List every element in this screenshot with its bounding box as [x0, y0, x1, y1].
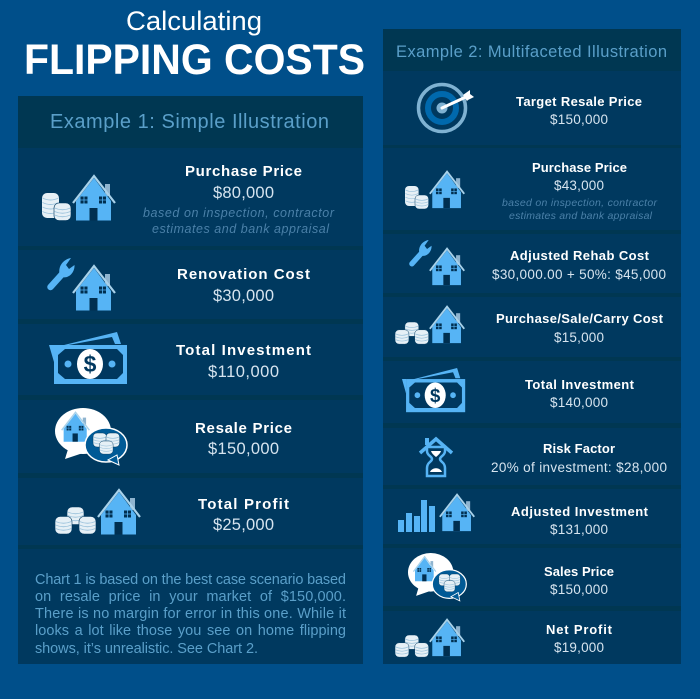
- row: purchase price: based on inspection, contractor: [143, 206, 335, 220]
- row: purchase price: estimates and bank appraisal: [152, 222, 330, 236]
- row: total profit: [18, 478, 363, 545]
- row: resale price: [18, 400, 363, 473]
- panel: example 1 simple illustration: [18, 96, 363, 664]
- row: target resale price: [383, 71, 681, 145]
- row: total investment: $110,000: [208, 363, 279, 381]
- panel: example 2 multifaceted illustration: [383, 29, 681, 664]
- note text: Chart 1 is based on the best case scenario based: [35, 572, 346, 588]
- title: FLIPPING COSTS: [24, 36, 365, 84]
- panel heading: example 2: Example 2: Multifaceted Illustration: [396, 43, 667, 61]
- row: purchase/sale/carry cost: Purchase/Sale/Carry Cost: [496, 311, 664, 326]
- row: net profit: $19,000: [554, 640, 604, 655]
- note text: shows, it’s unrealistic. See Chart 2.: [35, 641, 258, 657]
- row: total investment: Total Investment: [176, 342, 311, 359]
- row: adjusted investment: Adjusted Investment: [511, 504, 649, 519]
- row: net profit: Net Profit: [546, 622, 613, 637]
- row: target resale price: $150,000: [550, 112, 608, 127]
- note text: There is no margin for error in this one. While it: [35, 606, 346, 622]
- row: total investment: [383, 361, 681, 423]
- row: purchase price: [383, 148, 681, 230]
- row: adjusted rehab cost: Adjusted Rehab Cost: [510, 248, 650, 263]
- row: resale price: Resale Price: [195, 420, 292, 437]
- row: resale price: $150,000: [208, 440, 279, 458]
- row: purchase price: [18, 148, 363, 246]
- row: sales price: $150,000: [550, 582, 608, 597]
- row: renovation cost: [18, 250, 363, 319]
- row: adjusted rehab cost: $30,000.00 + 50%: $45,000: [492, 267, 666, 282]
- row: adjusted investment: [383, 489, 681, 544]
- note text: looks a lot like those you see on home flipping: [35, 623, 346, 639]
- panel heading: example 1: Example 1: Simple Illustration: [50, 111, 329, 133]
- row: sales price: [383, 548, 681, 606]
- row: renovation cost: Renovation Cost: [177, 266, 310, 283]
- row: target resale price: Target Resale Price: [516, 94, 642, 109]
- row: risk factor: [383, 428, 681, 485]
- row: purchase price: Purchase Price: [532, 160, 627, 175]
- title: Calculating: [126, 6, 262, 36]
- row: renovation cost: $30,000: [213, 287, 274, 305]
- row: purchase price: $80,000: [213, 184, 274, 202]
- note text: [18, 549, 363, 664]
- row: total profit: Total Profit: [198, 496, 289, 513]
- note text: on resale price in your market of $150,000.: [35, 589, 346, 605]
- row: purchase price: $43,000: [554, 178, 604, 193]
- row: sales price: Sales Price: [544, 564, 614, 579]
- row: purchase/sale/carry cost: $15,000: [554, 330, 604, 345]
- row: purchase price: estimates and bank appraisal: [509, 210, 653, 222]
- row: purchase price: Purchase Price: [185, 163, 302, 180]
- row: risk factor: Risk Factor: [543, 441, 615, 456]
- row: total investment: [18, 324, 363, 395]
- row: risk factor: 20% of investment: $28,000: [491, 460, 667, 475]
- row: purchase price: based on inspection, contractor: [502, 197, 658, 209]
- row: purchase/sale/carry cost: [383, 297, 681, 357]
- row: adjusted investment: $131,000: [550, 522, 608, 537]
- row: total profit: $25,000: [213, 516, 274, 534]
- row: total investment: Total Investment: [525, 377, 635, 392]
- row: adjusted rehab cost: [383, 234, 681, 293]
- title: [24, 6, 365, 84]
- row: net profit: [383, 611, 681, 664]
- row: total investment: $140,000: [550, 395, 608, 410]
